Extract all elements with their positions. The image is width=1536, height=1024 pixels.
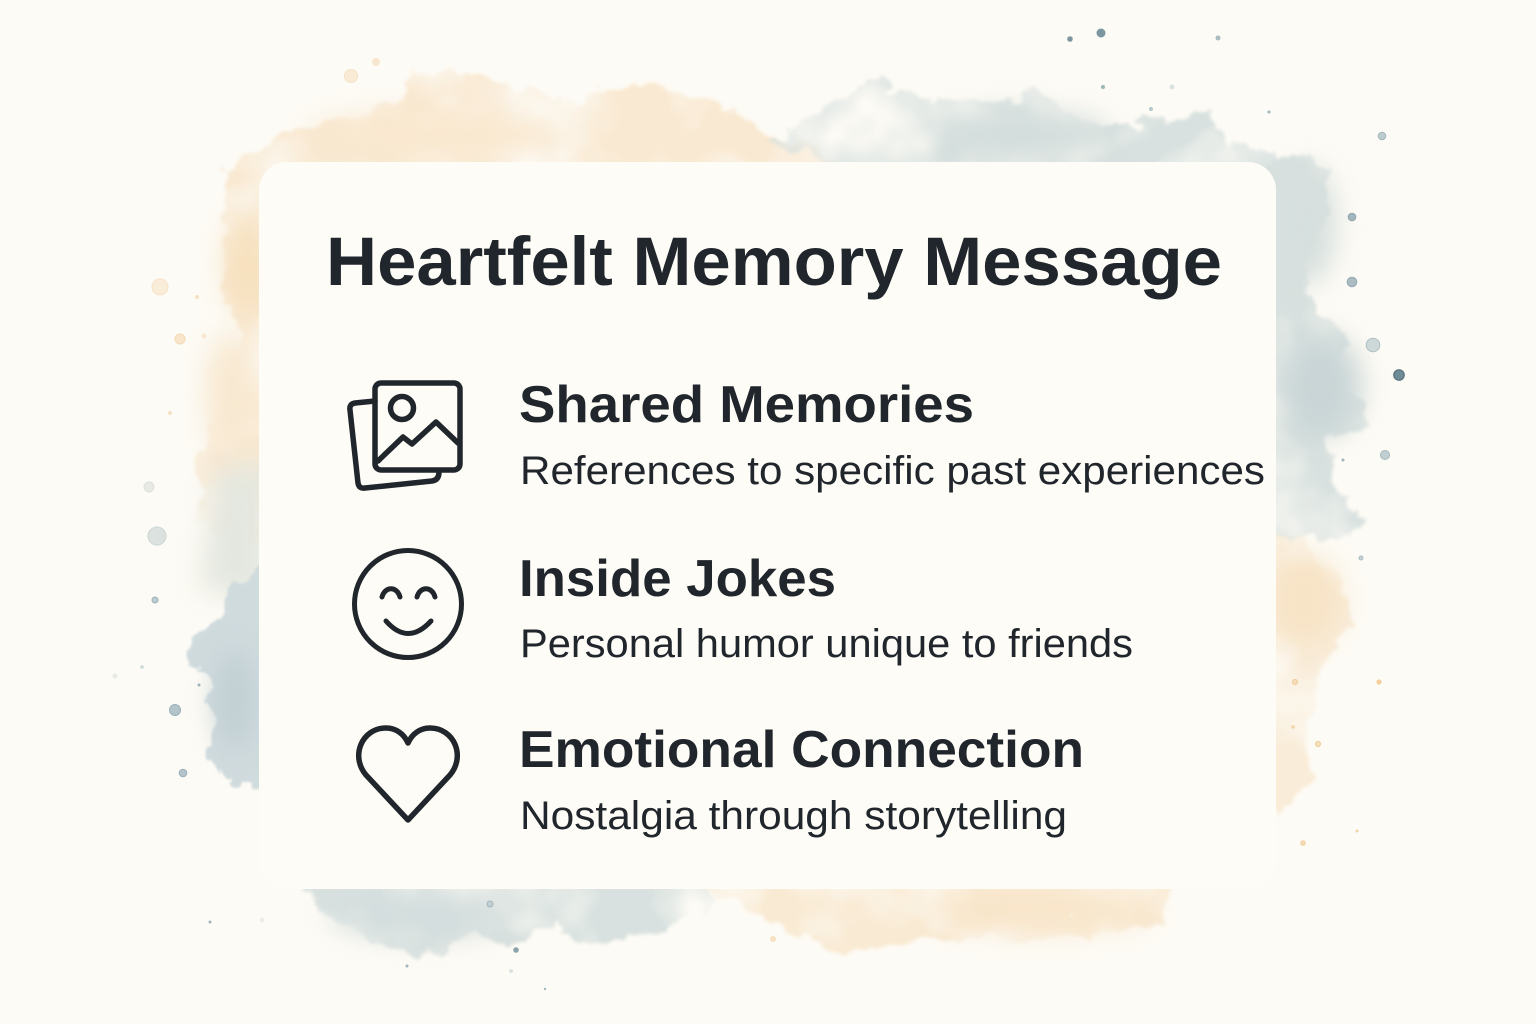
wash: blue-grey upper right bbox=[775, 78, 1364, 542]
card bbox=[259, 162, 1276, 889]
item: inside jokes bbox=[354, 550, 1133, 666]
heading: inside jokes: Inside Jokes bbox=[519, 550, 836, 608]
wash: blue-grey left bbox=[188, 545, 290, 795]
wash: peach right bbox=[1240, 530, 1352, 815]
item: emotional connection bbox=[359, 721, 1084, 838]
wash: pale grey-green left bbox=[200, 460, 270, 600]
wash: peach bottom bbox=[690, 870, 1172, 956]
wash: darker pigment patches bbox=[215, 111, 1362, 937]
wash: peach left mid bbox=[206, 333, 258, 457]
description: emotional connection: Nostalgia through storytelling bbox=[520, 794, 1067, 838]
icon: heart bbox=[359, 728, 457, 820]
title: Heartfelt Memory Message bbox=[326, 223, 1222, 300]
wash: peach upper left bbox=[194, 66, 850, 560]
paint splatter dots bbox=[112, 28, 1404, 990]
wash: blue-grey bottom bbox=[270, 860, 720, 954]
heading: emotional connection: Emotional Connection bbox=[519, 721, 1084, 779]
icon: photos bbox=[350, 383, 460, 488]
item: shared memories bbox=[350, 376, 1265, 493]
description: inside jokes: Personal humor unique to friends bbox=[520, 622, 1133, 666]
watercolor wash bbox=[188, 66, 1364, 956]
icon: smiley bbox=[354, 550, 462, 658]
heading: shared memories: Shared Memories bbox=[519, 376, 974, 434]
description: shared memories: References to specific past experiences bbox=[520, 449, 1265, 493]
